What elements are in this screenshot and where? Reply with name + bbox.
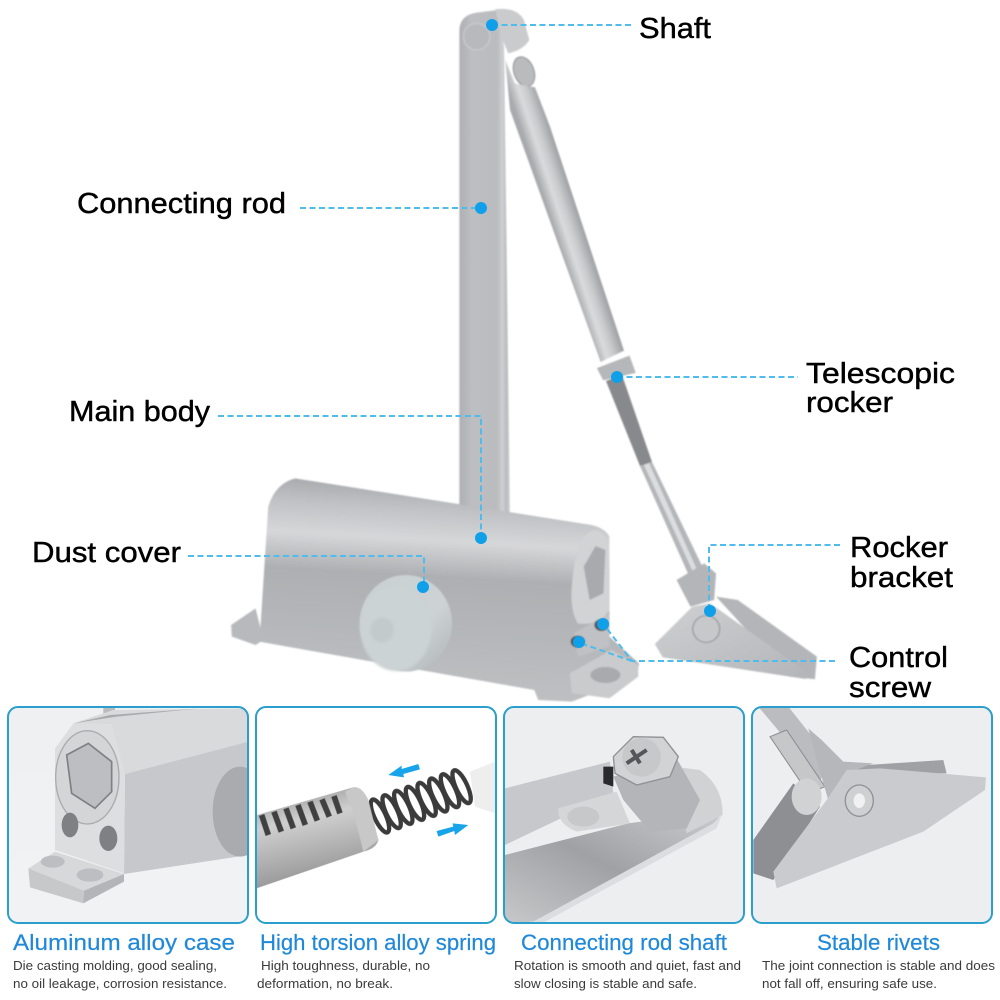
- connecting rod arm: [459, 9, 539, 513]
- leader: dust cover: [188, 556, 429, 593]
- leader: main body: [218, 416, 487, 544]
- label: Telescopic rocker: Telescopic: [806, 358, 955, 390]
- caption: high torsion alloy spring: High toughness, durable, no: [261, 958, 430, 973]
- caption: stable rivets: Stable rivets: [817, 930, 940, 955]
- panel: aluminum alloy case: [8, 707, 267, 923]
- label: Control screw: screw: [849, 672, 932, 704]
- caption: aluminum alloy case: no oil leakage, corrosion resistance.: [13, 976, 227, 991]
- label: Dust cover: Dust cover: [32, 537, 181, 569]
- leader: shaft: [486, 19, 632, 31]
- panel: connecting rod shaft: [504, 707, 744, 923]
- leader: control screw: [573, 618, 835, 661]
- caption: high torsion alloy spring: [257, 930, 496, 991]
- leader: telescopic rocker: [611, 371, 798, 383]
- caption: connecting rod shaft: [514, 930, 741, 991]
- rocker bracket: [655, 563, 817, 679]
- label: Rocker bracket: Rocker: [850, 532, 948, 564]
- label: Rocker bracket: bracket: [850, 562, 953, 594]
- arrows: [388, 764, 468, 837]
- caption: aluminum alloy case: [13, 930, 235, 991]
- panel: stable rivets: [752, 707, 992, 923]
- caption: connecting rod shaft: Rotation is smooth and quiet, fast and: [514, 958, 741, 973]
- telescopic rocker: [505, 60, 704, 578]
- label: Main body: Main body: [69, 396, 211, 428]
- dust cover: [360, 575, 452, 672]
- label: Control screw: [849, 642, 948, 704]
- leader: rocker bracket: [704, 545, 840, 617]
- label: Rocker bracket: [850, 532, 953, 594]
- label: Control screw: Control: [849, 642, 948, 674]
- coil spring: [367, 768, 474, 835]
- caption: stable rivets: The joint connection is stable and does: [762, 958, 996, 973]
- leader: connecting rod: [300, 202, 487, 214]
- label: Shaft: Shaft: [639, 13, 711, 45]
- caption: connecting rod shaft: Connecting rod shaft: [521, 930, 728, 955]
- panel: high torsion alloy spring: [256, 707, 496, 923]
- caption: aluminum alloy case: Aluminum alloy case: [13, 930, 235, 955]
- caption: stable rivets: not fall off, ensuring safe use.: [762, 976, 937, 991]
- caption: high torsion alloy spring: High torsion alloy spring: [260, 930, 496, 955]
- label: Telescopic rocker: rocker: [806, 387, 893, 419]
- caption: connecting rod shaft: slow closing is stable and safe.: [514, 976, 697, 991]
- caption: aluminum alloy case: Die casting molding, good sealing,: [13, 958, 217, 973]
- caption: stable rivets: [762, 930, 996, 991]
- main body: [231, 478, 639, 702]
- door closer product illustration: [231, 9, 817, 702]
- callout leaders and dots: [188, 19, 840, 661]
- label: Telescopic rocker: [806, 358, 955, 419]
- caption: high torsion alloy spring: deformation, no break.: [257, 976, 393, 991]
- label: Connecting rod: Connecting rod: [77, 188, 286, 220]
